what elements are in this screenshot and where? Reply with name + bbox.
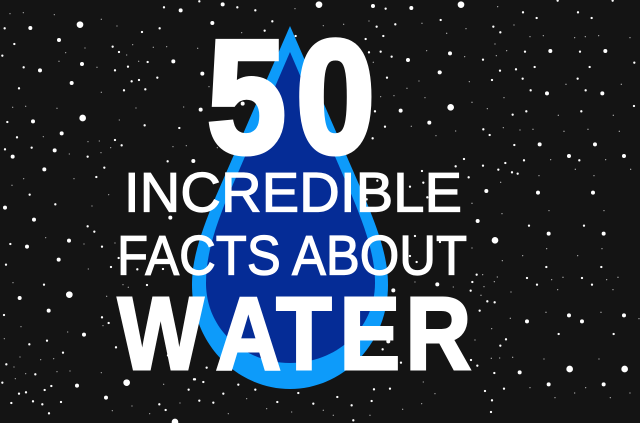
drop inner shape: [206, 52, 375, 363]
water drop icon: [192, 26, 388, 389]
title: [117, 8, 471, 391]
line: facts about: FACTS ABOUT: [117, 224, 467, 286]
number 50: 50: [207, 8, 375, 186]
word water: WATER: [118, 276, 471, 391]
line: incredible: INCREDIBLE: [124, 160, 462, 224]
drop outer shape: [192, 26, 388, 389]
